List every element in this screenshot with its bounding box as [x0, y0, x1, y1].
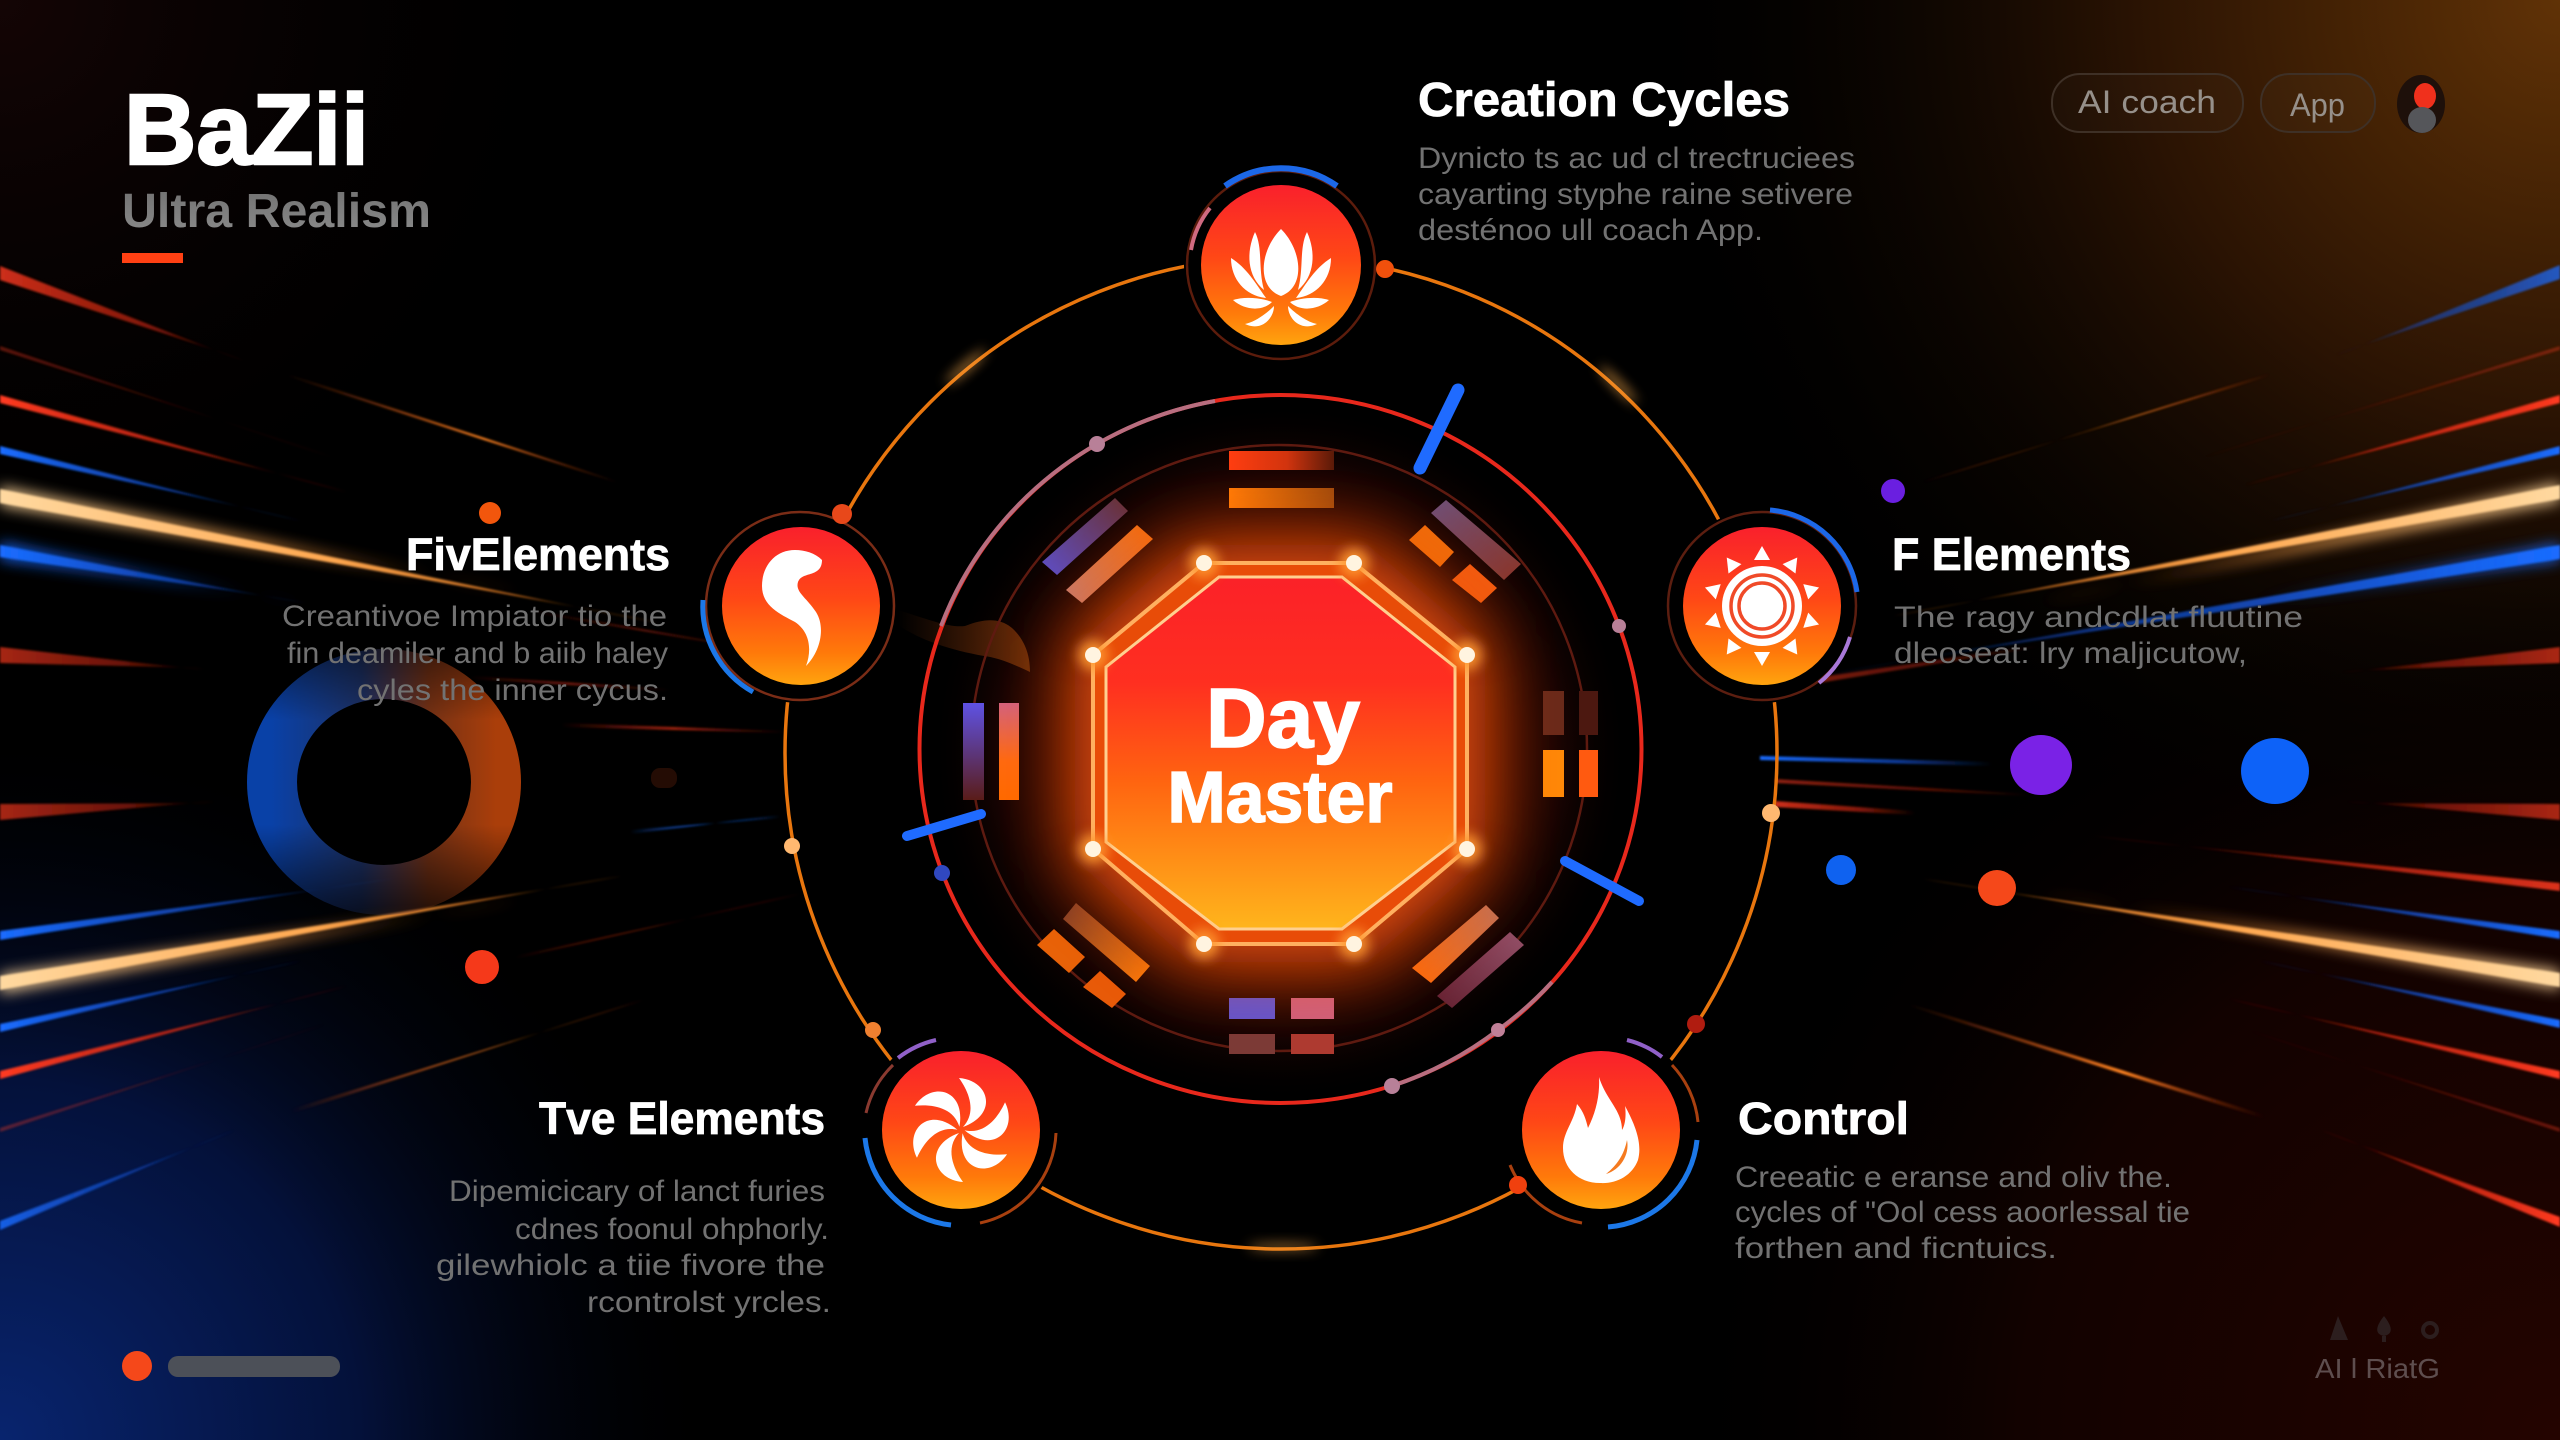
icon: swirl — [762, 550, 822, 666]
center octagon: Day Master: Master — [1168, 758, 1392, 838]
text: Creation Cycles: Dynicto ts ac ud cl trectruciees — [1418, 142, 1855, 175]
text: F Elements — [1892, 529, 2303, 670]
node: top lotus — [1184, 168, 1394, 362]
central core disc — [930, 400, 1630, 1100]
text: FivElements: fin deamiler and b aiib haley — [287, 637, 668, 670]
text: F Elements: dleoseat: lry maljicutow, — [1894, 637, 2247, 670]
icon: lotus — [1231, 229, 1331, 326]
inner rings — [920, 395, 1642, 1103]
icon: flame — [1563, 1077, 1639, 1183]
footer label: AI l RiatG — [2315, 1353, 2440, 1384]
node: bottom-left pinwheel — [862, 1031, 1060, 1229]
progress indicator — [122, 1351, 340, 1381]
text: Tve Elements: gilewhiolc a tiie fivore the — [436, 1249, 825, 1282]
center octagon: Day Master — [1078, 548, 1482, 959]
light streaks: right side — [1760, 265, 2560, 1227]
text: Creation Cycles — [1418, 74, 1855, 247]
text: Creation Cycles: Creation Cycles — [1418, 74, 1790, 127]
icon: pinwheel — [903, 1078, 1019, 1182]
text: FivElements — [282, 529, 670, 707]
icon: avatar — [2397, 75, 2445, 133]
text: Control: cycles of "Ool cess aoorlessal tie — [1735, 1196, 2190, 1229]
text: FivElements: FivElements — [406, 529, 670, 580]
title block — [122, 74, 431, 263]
decorative gradient ring — [272, 674, 496, 890]
octagon glow — [1075, 545, 1485, 962]
text: Control — [1735, 1093, 2190, 1265]
node: left swirl — [703, 504, 897, 703]
text: Control: forthen and ficntuics. — [1735, 1232, 2057, 1265]
text: FivElements: Creantivoe Impiator tio the — [282, 600, 667, 633]
floating orbs — [465, 479, 2309, 984]
top-right pills — [2052, 74, 2375, 132]
blue accent bars — [907, 390, 1639, 901]
center octagon: Day Master: Day — [1206, 671, 1360, 765]
icon: sun — [1702, 546, 1822, 666]
text: Tve Elements: cdnes foonul ohphorly. — [515, 1213, 829, 1246]
text: Tve Elements: rcontrolst yrcles. — [587, 1286, 831, 1319]
text: Tve Elements: Tve Elements — [539, 1093, 825, 1144]
top-right pills: AI coach — [2078, 84, 2216, 120]
footer label — [2315, 1316, 2440, 1384]
node: right sun — [1665, 509, 1859, 703]
text: F Elements: The ragy andcdlat fluutine — [1894, 601, 2303, 634]
text: F Elements: F Elements — [1892, 529, 2131, 580]
trigram bars — [963, 451, 1598, 1054]
node: bottom-right flame — [1502, 1031, 1700, 1229]
top-right pills: App — [2290, 87, 2345, 123]
outer orbit ring — [784, 257, 1780, 1250]
title block: BaZii — [124, 74, 369, 186]
light streaks: left side — [0, 266, 800, 1230]
text: Tve Elements: Dipemicicary of lanct furies — [449, 1175, 825, 1208]
faint shape behind ring — [898, 610, 1030, 672]
text: Control: Creeatic e eranse and oliv the. — [1735, 1161, 2172, 1194]
text: Creation Cycles: cayarting styphe raine setivere — [1418, 178, 1853, 211]
title block: Ultra Realism — [122, 185, 431, 238]
text: Control: Control — [1738, 1093, 1909, 1144]
text: Creation Cycles: desténoo ull coach App. — [1418, 214, 1763, 247]
text: Tve Elements — [436, 1093, 831, 1319]
text: FivElements: cyles the inner cycus. — [357, 674, 668, 707]
